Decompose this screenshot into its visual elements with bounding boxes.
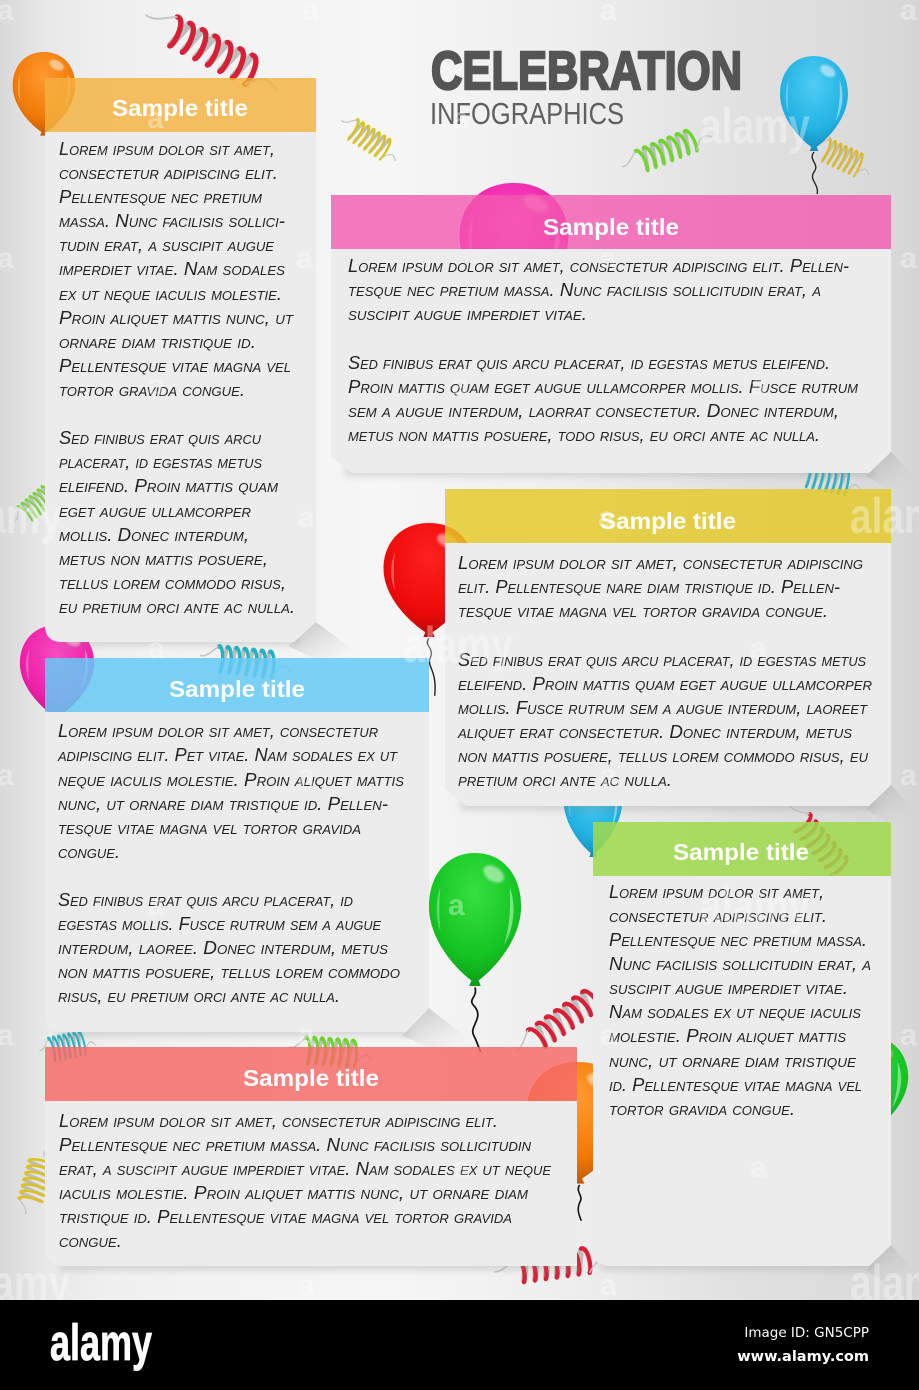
text: orange panel: tudin erat, a suscipit augue	[59, 234, 274, 255]
text: orange panel: mollis. Donec interdum,	[59, 524, 249, 545]
watermarks: a	[452, 1151, 469, 1184]
streamer: green bottom	[288, 1036, 374, 1067]
text: pink panel: Lorem ipsum dolor sit amet, consectetur adipiscing elit. Pellen-	[348, 255, 849, 276]
panel: red	[45, 1047, 580, 1270]
panel: blue	[45, 658, 470, 1052]
text: green panel: Nam sodales ex ut neque iaculis	[609, 1001, 861, 1022]
text: yellow panel: Sed finibus erat quis arcu placerat, id egestas metus	[458, 649, 866, 670]
text: pink panel: tesque nec pretium massa. Nunc facilisis sollicitudin erat, a	[348, 279, 821, 300]
text: pink panel	[348, 255, 858, 445]
heading: red	[45, 1047, 577, 1101]
text: yellow panel: Lorem ipsum dolor sit amet, consectetur adipiscing	[458, 552, 863, 573]
heading: blue	[45, 658, 429, 712]
text: orange panel: massa. Nunc facilisis sollici-	[59, 210, 285, 231]
streamer: red bottom	[493, 1244, 614, 1286]
watermarks: alamy	[403, 617, 513, 673]
text: orange panel	[59, 138, 295, 617]
text: blue panel: adipiscing elit. Pet vitae. Nam sodales ex ut	[57, 744, 398, 765]
balloon: green	[429, 853, 521, 1052]
text: green panel: suscipit augue imperdiet vitae.	[609, 977, 848, 998]
text: orange panel: Lorem ipsum dolor sit amet,	[59, 138, 275, 159]
text: yellow panel: aliquet erat consectetur. Donec interdum, metus	[457, 721, 852, 742]
text: orange panel: eleifend. Proin mattis quam	[59, 475, 278, 496]
watermarks: a	[298, 759, 315, 792]
text: yellow panel: non mattis posuere, tellus lorem commodo risus, eu	[458, 745, 869, 766]
balloon: pink behind heading	[460, 183, 568, 316]
text: blue panel	[57, 720, 404, 1006]
text: blue panel: neque iaculis molestie. Proin aliquet mattis	[58, 769, 404, 790]
balloon: green right	[822, 1035, 908, 1140]
text: green panel: nunc, ut ornare diam tristique	[609, 1050, 856, 1071]
watermarks: a	[147, 102, 164, 135]
text: green panel: Nunc facilisis sollicitudin erat, a	[609, 953, 871, 974]
watermarks: a	[900, 242, 917, 275]
heading: green: Sample title	[673, 839, 809, 865]
text: red panel: Pellentesque nec pretium massa. Nunc facilisis sollicitudin	[59, 1134, 532, 1155]
balloon: orange top left	[13, 52, 75, 136]
text: yellow panel: tesque vitae magna vel tortor gravida congue.	[458, 600, 828, 621]
watermarks: a	[452, 369, 469, 402]
text: orange panel: eget augue ullamcorper	[59, 500, 251, 521]
watermarks: a	[298, 1269, 315, 1302]
text: blue panel: congue.	[58, 841, 120, 862]
watermarks: a	[750, 632, 767, 665]
panel: orange	[45, 78, 356, 664]
streamer: green left	[10, 478, 65, 529]
text: red panel: tristique id. Pellentesque vitae magna vel tortor gravida	[59, 1206, 512, 1227]
watermarks: a	[296, 242, 313, 275]
text: pink panel: suscipit augue imperdiet vitae.	[348, 303, 587, 324]
text: blue panel: non mattis posuere, tellus lorem commodo	[58, 961, 400, 982]
watermarks: a	[298, 1019, 315, 1052]
watermarks: a	[600, 759, 617, 792]
heading: orange	[45, 78, 316, 132]
text: orange panel: Pellentesque nec pretium	[59, 186, 262, 207]
text: blue panel: Lorem ipsum dolor sit amet, consectetur	[58, 720, 378, 741]
text: orange panel: metus non mattis posuere,	[59, 548, 268, 569]
streamer: red behind green panel	[780, 799, 862, 891]
watermarks: a	[600, 242, 617, 275]
text: green panel: tortor gravida congue.	[609, 1098, 795, 1119]
streamer: teal under pink panel	[790, 458, 864, 497]
text: pink panel: sem a augue interdum, laorrat consectetur. Donec interdum,	[348, 400, 839, 421]
streamer: teal bottom left	[37, 1029, 97, 1063]
balloon: red	[384, 523, 474, 696]
panel: yellow	[445, 489, 919, 826]
streamer: teal middle	[198, 644, 293, 679]
watermarks: a	[148, 369, 165, 402]
text: orange panel: ex ut neque iaculis molestie.	[59, 283, 282, 304]
text: yellow panel: pretium orci ante ac nulla.	[458, 769, 672, 790]
watermarks: a	[600, 1019, 617, 1052]
text: pink panel: Sed finibus erat quis arcu placerat, id egestas metus eleifend.	[348, 352, 830, 373]
text: yellow panel	[457, 552, 872, 790]
title: INFOGRAPHICS	[430, 96, 624, 131]
text: orange panel: Sed finibus erat quis arcu	[59, 427, 262, 448]
text: blue panel: egestas mollis. Fusce rutrum sem a augue	[58, 913, 381, 934]
streamer: red centre	[509, 975, 620, 1063]
panel: green	[593, 822, 919, 1287]
streamer: red top	[138, 3, 286, 98]
text: pink panel: Proin mattis quam eget augue ullamcorper mollis. Fusce rutrum	[348, 376, 858, 397]
text: orange panel: tellus lorem commodo risus,	[59, 572, 286, 593]
heading: green	[593, 822, 891, 876]
text: red panel: iaculis molestie. Proin aliquet mattis nunc, ut ornare diam	[59, 1182, 528, 1203]
text: red panel: erat, a suscipit augue imperdiet vitae. Nam sodales ex ut neque	[59, 1158, 551, 1179]
heading: yellow: Sample title	[600, 508, 736, 534]
heading: orange: Sample title	[112, 95, 248, 121]
text: orange panel: eu pretium orci ante ac nulla.	[59, 596, 295, 617]
text: orange panel: Pellentesque vitae magna vel	[59, 355, 291, 376]
watermarks: alamy	[700, 98, 810, 154]
heading: pink	[331, 195, 891, 249]
text: yellow panel: mollis. Fusce rutrum sem a augue interdum, laoreet	[458, 697, 868, 718]
text: green panel	[609, 881, 871, 1119]
text: red panel: congue.	[59, 1230, 122, 1251]
title	[430, 41, 742, 131]
watermarks: a	[148, 1151, 165, 1184]
streamer: yellow bottom left	[16, 1144, 56, 1218]
text: green panel: molestie. Proin aliquet mattis	[609, 1025, 846, 1046]
balloon: magenta left	[20, 625, 94, 720]
text: yellow panel: elit. Pellentesque nare diam tristique id. Pellen-	[458, 576, 840, 597]
watermarks: a	[148, 632, 165, 665]
watermarks: alamy	[700, 878, 810, 934]
watermarks: a	[448, 889, 465, 922]
text: blue panel: interdum, laoree. Donec interdum, metus	[58, 937, 388, 958]
text: blue panel: tesque vitae magna vel tortor gravida	[58, 817, 361, 838]
text: orange panel: consectetur adipiscing elit.	[59, 162, 278, 183]
text: orange panel: ornare diam tristique id.	[59, 331, 256, 352]
text: orange panel: tortor gravida congue.	[59, 379, 245, 400]
streamer: gold right	[809, 134, 876, 181]
text: green panel: id. Pellentesque vitae magna vel	[609, 1074, 862, 1095]
footer bar	[0, 1300, 919, 1390]
watermarks: a	[298, 501, 315, 534]
watermarks: a	[598, 501, 615, 534]
text: blue panel: risus, eu pretium orci ante ac nulla.	[58, 985, 340, 1006]
heading: yellow	[445, 489, 891, 543]
text: orange panel: placerat, id egestas metus	[59, 451, 262, 472]
text: pink panel: metus non mattis posuere, todo risus, eu orci ante ac nulla.	[348, 424, 820, 445]
watermarks: a	[750, 369, 767, 402]
text: green panel: consectetur adipiscing elit.	[609, 905, 827, 926]
balloon: light blue middle	[564, 762, 622, 857]
footer logo: alamy	[50, 1314, 152, 1371]
watermarks: a	[900, 1019, 917, 1052]
balloon: blue top right	[780, 56, 848, 194]
streamer: yellow top	[335, 113, 403, 166]
text: green panel: Pellentesque nec pretium massa.	[609, 929, 867, 950]
watermarks: a	[600, 1269, 617, 1302]
heading: red: Sample title	[243, 1065, 379, 1091]
text: orange panel: Proin aliquet mattis nunc, ut	[59, 307, 294, 328]
text: green panel: Lorem ipsum dolor sit amet,	[609, 881, 824, 902]
watermarks: a	[452, 102, 469, 135]
text: blue panel: nunc, ut ornare diam tristique id. Pellen-	[58, 793, 388, 814]
text: orange panel: imperdiet vitae. Nam sodales	[59, 258, 285, 279]
text: yellow panel: eleifend. Proin mattis quam eget augue ullamcorper	[458, 673, 872, 694]
title: CELEBRATION	[431, 41, 742, 101]
watermarks: a	[900, 759, 917, 792]
heading: pink: Sample title	[543, 214, 679, 240]
text: red panel: Lorem ipsum dolor sit amet, consectetur adipiscing elit.	[59, 1110, 498, 1131]
text: red panel	[59, 1110, 551, 1251]
text: blue panel: Sed finibus erat quis arcu placerat, id	[58, 889, 353, 910]
watermarks: a	[750, 1151, 767, 1184]
watermarks: a	[148, 889, 165, 922]
image id: Image ID: GN5CPP	[744, 1325, 869, 1341]
website: www.alamy.com	[737, 1349, 869, 1365]
streamer: gold left edge	[44, 167, 72, 232]
streamer: green top	[618, 122, 715, 179]
balloon: orange bottom	[527, 1062, 629, 1221]
panel: pink	[331, 195, 919, 492]
heading: blue: Sample title	[169, 676, 305, 702]
